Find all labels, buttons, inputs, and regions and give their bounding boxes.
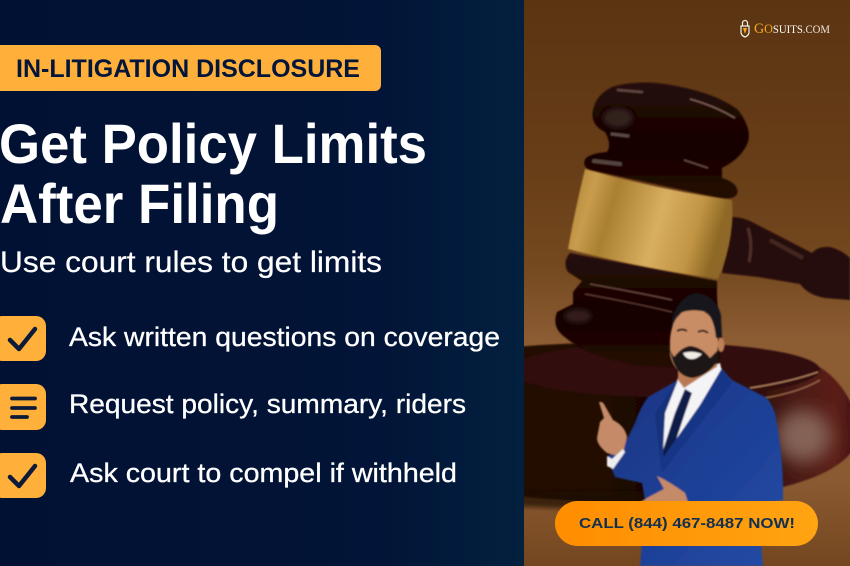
icon: document lines	[0, 384, 46, 430]
photo background	[524, 0, 850, 566]
hair	[672, 293, 722, 338]
tie	[663, 389, 692, 462]
list item: request policy	[0, 384, 466, 430]
title	[0, 112, 427, 235]
gavel upper head	[584, 83, 749, 198]
gavel lower head	[555, 253, 720, 368]
icon: check mark	[0, 316, 46, 361]
panel: gavel photo	[524, 0, 850, 566]
ear	[718, 338, 724, 352]
logo: gosuits.com: GOSUITS.COM	[754, 21, 830, 37]
logo icon: shield lock	[741, 20, 749, 37]
pointing hand	[597, 402, 627, 457]
lower hand	[640, 476, 688, 502]
lapel right	[660, 368, 732, 473]
eyes and brows	[677, 330, 708, 333]
lapel left	[655, 380, 678, 467]
subtitle: Use court rules to get limits	[0, 246, 382, 279]
beard	[670, 346, 718, 378]
shadow under block	[524, 494, 644, 511]
badge: in-litigation disclosure: IN-LITIGATION DISCLOSURE	[16, 55, 360, 83]
title: Get Policy Limits	[0, 112, 427, 175]
list item: request policy: Request policy, summary, riders	[69, 389, 466, 419]
panel: left navy background	[0, 0, 524, 566]
neck	[678, 362, 718, 388]
title: After Filing	[0, 172, 279, 235]
person: attorney in blue suit	[597, 293, 783, 566]
list item: compel	[0, 453, 457, 498]
suit body	[607, 367, 783, 566]
list item: written questions	[0, 316, 500, 361]
badge: in-litigation disclosure	[0, 45, 381, 91]
smile	[683, 352, 702, 359]
sound block	[510, 343, 850, 502]
gavel handle	[722, 217, 850, 300]
list item: compel: Ask court to compel if withheld	[70, 458, 457, 488]
list item: written questions: Ask written questions on coverage	[69, 322, 500, 352]
shirt cuff	[607, 449, 625, 469]
face	[670, 308, 718, 377]
call to action button	[555, 501, 818, 546]
call to action button: CALL (844) 467-8487 NOW!	[579, 516, 795, 532]
icon: check mark	[0, 453, 46, 498]
shirt	[663, 363, 722, 453]
gavel gold band	[568, 169, 732, 279]
